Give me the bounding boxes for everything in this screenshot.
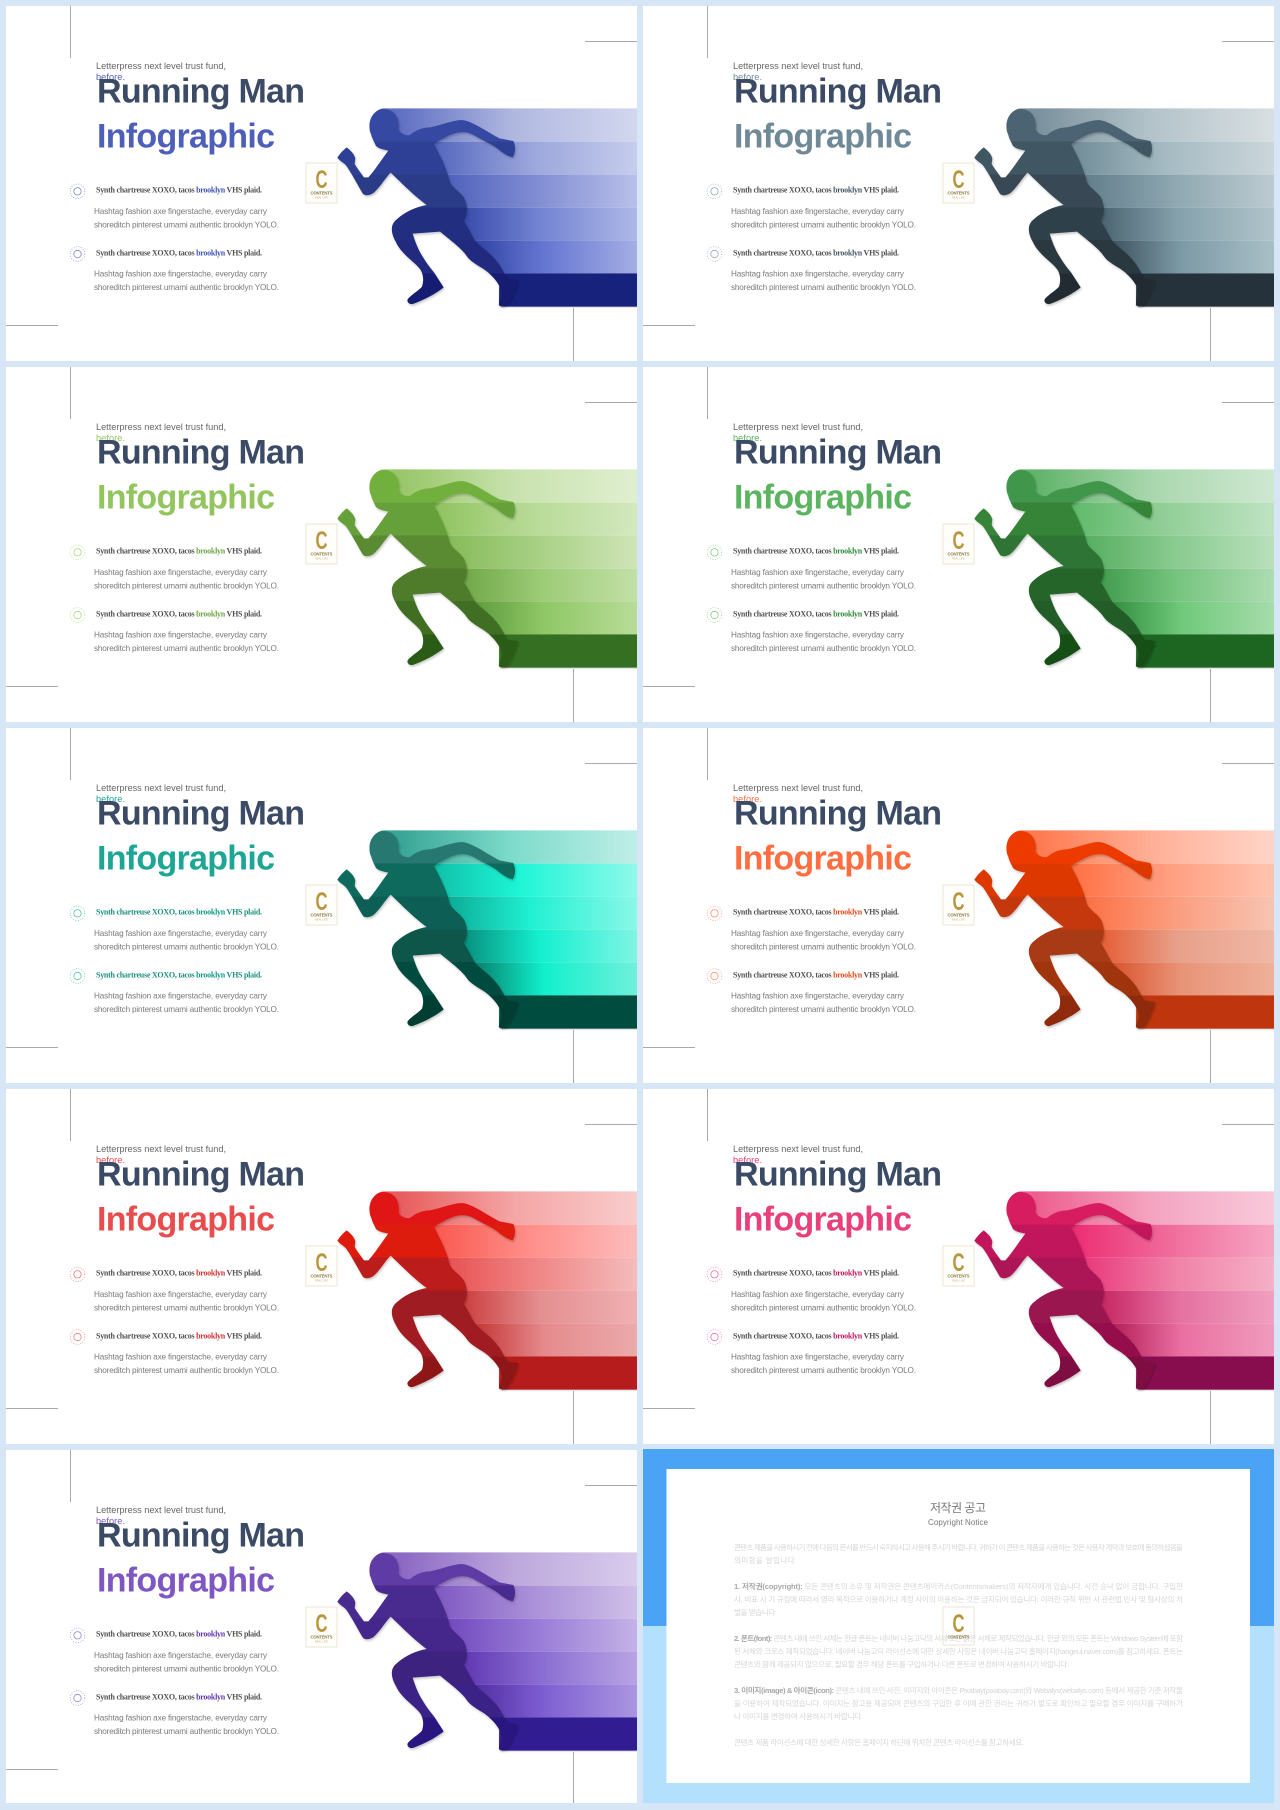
list item 1	[70, 184, 279, 230]
intro text: before.	[96, 794, 125, 804]
logo badge: CONTENTS	[310, 190, 333, 196]
heading: Infographic: Infographic	[97, 1562, 275, 1600]
heading: Infographic: Infographic	[97, 840, 275, 878]
intro text: Letterpress next level trust fund,	[96, 1505, 226, 1515]
list item 2: shoreditch pinterest umami authentic brooklyn YOLO.	[731, 1005, 916, 1014]
list item 2: Synth chartreuse XOXO, tacos brooklyn VHS plaid.	[733, 1331, 899, 1340]
intro text: Letterpress next level trust fund,	[733, 422, 863, 432]
logo badge: C	[316, 888, 328, 916]
logo badge: CONTENTS	[948, 552, 970, 556]
heading: Running Man: Running Man	[734, 794, 942, 832]
logo badge	[306, 885, 337, 925]
logo badge: REAL LIFE	[952, 196, 965, 200]
panel: light green slide	[6, 367, 637, 722]
list item 1: Synth chartreuse XOXO, tacos brooklyn VHS plaid.	[733, 908, 899, 917]
chart: speed bands and runner	[974, 1191, 1274, 1390]
list item 2: Synth chartreuse XOXO, tacos brooklyn VHS plaid.	[96, 1331, 262, 1340]
list item 1: shoreditch pinterest umami authentic brooklyn YOLO.	[731, 943, 916, 952]
list item 1: shoreditch pinterest umami authentic brooklyn YOLO.	[731, 582, 916, 591]
logo badge: REAL LIFE	[315, 556, 328, 560]
list item 2: Hashtag fashion axe fingerstache, everyday carry	[731, 630, 905, 640]
logo badge	[943, 1607, 974, 1645]
list item 1: Hashtag fashion axe fingerstache, everyday carry	[94, 1651, 268, 1660]
chart: speed bands and runner	[337, 108, 637, 307]
list item 1	[707, 184, 916, 230]
list item 2: Hashtag fashion axe fingerstache, everyday carry	[731, 1352, 905, 1362]
heading: Running Man: Running Man	[97, 72, 305, 110]
chart: speed bands and runner	[337, 830, 637, 1029]
chart: speed bands and runner	[974, 108, 1274, 307]
list item 2: Synth chartreuse XOXO, tacos brooklyn VHS plaid.	[96, 1692, 262, 1701]
intro text: Letterpress next level trust fund,	[733, 1144, 863, 1154]
logo badge: CONTENTS	[310, 1634, 333, 1640]
heading: Infographic: Infographic	[97, 1200, 275, 1238]
list item 1: Synth chartreuse XOXO, tacos brooklyn VHS plaid.	[96, 908, 262, 917]
logo badge: CONTENTS	[948, 190, 970, 196]
intro text: Letterpress next level trust fund,	[96, 422, 226, 432]
intro text: before.	[96, 433, 125, 443]
panel: purple slide	[6, 1450, 637, 1803]
logo badge	[306, 524, 337, 564]
notice body text: 벌을 받습니다.	[734, 1607, 777, 1617]
list item 2	[70, 247, 279, 292]
icon: runner silhouette	[337, 470, 518, 667]
panel: teal slide	[6, 728, 637, 1083]
list item 2: Hashtag fashion axe fingerstache, everyday carry	[94, 992, 268, 1000]
list item 1: Hashtag fashion axe fingerstache, everyday carry	[731, 1290, 905, 1299]
logo badge: C	[952, 527, 964, 555]
intro text: Letterpress next level trust fund,	[733, 61, 863, 71]
heading: Infographic: Infographic	[97, 478, 275, 516]
intro text	[733, 1144, 863, 1165]
list item 2	[70, 608, 279, 653]
logo badge: C	[316, 527, 328, 555]
logo badge	[306, 1246, 337, 1286]
logo badge: CONTENTS	[948, 1634, 970, 1640]
list item 2: Hashtag fashion axe fingerstache, everyday carry	[731, 992, 905, 1000]
list item 1: Synth chartreuse XOXO, tacos brooklyn VHS plaid.	[96, 1269, 262, 1278]
notice body text: 콘텐츠와 함께 제공되지 않으므로, 필요할 경우 해당 폰트를 구입하거나 다른 폰트로 변경하여 사용하시기 바랍니다.	[734, 1659, 1069, 1669]
heading: Running Man: Running Man	[97, 434, 305, 472]
logo badge: CONTENTS	[948, 1274, 970, 1278]
list item 2: shoreditch pinterest umami authentic brooklyn YOLO.	[94, 644, 279, 653]
list item 1: Synth chartreuse XOXO, tacos brooklyn VHS plaid.	[733, 1269, 899, 1278]
intro text	[733, 422, 863, 443]
logo badge: REAL LIFE	[315, 196, 328, 200]
chart: speed bands and runner	[337, 469, 637, 668]
logo badge: REAL LIFE	[315, 1278, 328, 1282]
intro text: before.	[96, 72, 125, 82]
logo badge: CONTENTS	[948, 912, 970, 918]
list item 2: shoreditch pinterest umami authentic brooklyn YOLO.	[731, 644, 916, 653]
intro text: before.	[733, 433, 762, 443]
icon: runner silhouette	[337, 109, 518, 306]
intro text	[96, 422, 226, 443]
list item 1	[707, 906, 916, 952]
list item 2: shoreditch pinterest umami authentic brooklyn YOLO.	[94, 1005, 279, 1014]
icon: runner silhouette	[974, 1192, 1155, 1389]
list item 1: shoreditch pinterest umami authentic brooklyn YOLO.	[94, 943, 279, 952]
logo badge: C	[952, 1249, 964, 1277]
heading: Running Man: Running Man	[97, 794, 305, 832]
list item 1: shoreditch pinterest umami authentic brooklyn YOLO.	[731, 221, 916, 230]
list item 1: Hashtag fashion axe fingerstache, everyday carry	[731, 207, 905, 216]
logo badge: REAL LIFE	[952, 1278, 965, 1282]
icon: runner silhouette	[974, 831, 1155, 1028]
list item 2: Hashtag fashion axe fingerstache, everyday carry	[731, 270, 905, 278]
notice body text: 2. 폰트(font): 콘텐츠 내에 쓰인 서체는 한글 폰트는 네이버 나눔고딕의 서체 또는 맑은 서체로 제작되었습니다. 한글 외의 모든 폰트는 Windows System에 포함	[734, 1633, 1183, 1643]
intro text	[96, 1505, 226, 1526]
list item 2: Synth chartreuse XOXO, tacos brooklyn VHS plaid.	[733, 970, 899, 979]
list item 1	[70, 1267, 279, 1313]
list item 1: Synth chartreuse XOXO, tacos brooklyn VHS plaid.	[96, 186, 262, 195]
panel: copyright notice	[643, 1449, 1274, 1803]
list item 2: Synth chartreuse XOXO, tacos brooklyn VHS plaid.	[733, 248, 899, 257]
intro text	[733, 783, 863, 804]
logo badge	[943, 1246, 974, 1286]
icon: runner silhouette	[337, 831, 518, 1028]
list item 2: Hashtag fashion axe fingerstache, everyday carry	[94, 270, 268, 278]
heading: Running Man: Running Man	[734, 72, 942, 110]
notice body text: 사, 비표 시 기 규정에 따라서 영리 목적으로 이용하거나 계정 사이의 이용하는 것은 금지되어 있습니다. 이러한 규칙 위반 시 관련법 민사 및 형사상의 처	[734, 1594, 1183, 1604]
logo badge: C	[316, 166, 328, 194]
list item 2: Synth chartreuse XOXO, tacos brooklyn VHS plaid.	[96, 609, 262, 618]
notice subtitle: Copyright Notice	[928, 1518, 989, 1527]
logo badge: REAL LIFE	[315, 1640, 328, 1644]
logo badge: C	[952, 888, 964, 916]
list item 1: shoreditch pinterest umami authentic brooklyn YOLO.	[94, 582, 279, 591]
logo badge	[306, 1607, 337, 1647]
panel: green slide	[643, 367, 1274, 722]
panel: pink slide	[643, 1089, 1274, 1444]
list item 2: Hashtag fashion axe fingerstache, everyday carry	[94, 1352, 268, 1362]
intro text: before.	[733, 794, 762, 804]
notice body text: 의미함을 알립니다.	[734, 1555, 797, 1565]
logo badge: CONTENTS	[310, 1274, 333, 1278]
chart: speed bands and runner	[974, 830, 1274, 1029]
list item 1: Hashtag fashion axe fingerstache, everyday carry	[94, 1290, 268, 1299]
logo badge: CONTENTS	[310, 912, 333, 918]
list item 1: shoreditch pinterest umami authentic brooklyn YOLO.	[94, 1665, 279, 1674]
logo badge: REAL LIFE	[952, 918, 965, 922]
intro text: Letterpress next level trust fund,	[733, 783, 863, 793]
list item 2: Hashtag fashion axe fingerstache, everyday carry	[94, 1714, 268, 1722]
logo badge	[943, 163, 974, 203]
list item 2: shoreditch pinterest umami authentic brooklyn YOLO.	[731, 1366, 916, 1375]
heading: Infographic: Infographic	[734, 1200, 912, 1238]
panel: orange slide	[643, 728, 1274, 1083]
panel: blue slide	[6, 6, 637, 361]
intro text	[733, 61, 863, 82]
list item 2	[70, 1691, 279, 1736]
icon: runner silhouette	[974, 470, 1155, 667]
logo badge	[306, 163, 337, 203]
intro text: before.	[733, 72, 762, 82]
list item 2: shoreditch pinterest umami authentic brooklyn YOLO.	[94, 283, 279, 292]
list item 2: Synth chartreuse XOXO, tacos brooklyn VHS plaid.	[733, 609, 899, 618]
list item 1: shoreditch pinterest umami authentic brooklyn YOLO.	[94, 221, 279, 230]
list item 2	[707, 1330, 916, 1375]
list item 1	[70, 545, 279, 591]
logo badge: C	[316, 1249, 328, 1277]
list item 1: Hashtag fashion axe fingerstache, everyday carry	[94, 207, 268, 216]
notice body text: 된 서체와 크로스 제작되었습니다. 네이버 나눔고딕 라이선스에 대한 상세한 사항은 네이버 나눔고딕 홈페이지(hangeul.naver.com)를 참고하세요. 폰트는	[734, 1646, 1183, 1656]
list item 1	[70, 906, 279, 952]
notice body text: 1. 저작권(copyright): 모든 콘텐츠의 소유 및 저작권은 콘텐츠메이커스(Contentsmakers)의 저작자에게 있습니다. 사전 승낙 없이 금합니다. 구입한	[734, 1581, 1183, 1591]
intro text: Letterpress next level trust fund,	[96, 61, 226, 71]
intro text	[96, 61, 226, 82]
notice body text: 콘텐츠 제품을 사용하시기 전에 다음의 문서를 반드시 숙지하시고 사용해 주시기 바랍니다. 귀하가 이 콘텐츠 제품을 사용하는 것은 사용자 계약과 보호에 동의하셨음을	[734, 1542, 1183, 1552]
logo badge: C	[952, 1610, 964, 1638]
notice title: 저작권 공고	[930, 1501, 986, 1515]
logo badge: REAL LIFE	[952, 556, 965, 560]
icon: runner silhouette	[337, 1553, 518, 1750]
list item 2	[707, 969, 916, 1014]
intro text: before.	[96, 1155, 125, 1165]
icon: runner silhouette	[337, 1192, 518, 1389]
heading: Running Man: Running Man	[97, 1156, 305, 1194]
notice body text: 콘텐츠 제품 라이선스에 대한 상세한 사항은 홈페이지 하단에 위치한 콘텐츠 라이선스를 참고하세요.	[734, 1737, 1024, 1747]
logo badge: C	[316, 1610, 328, 1638]
icon: runner silhouette	[974, 109, 1155, 306]
heading: Running Man: Running Man	[97, 1516, 305, 1554]
logo badge: REAL LIFE	[315, 918, 328, 922]
list item 2	[707, 247, 916, 292]
notice body text: 나 이미지를 변경하여 사용하시기 바랍니다.	[734, 1711, 863, 1721]
heading: Running Man: Running Man	[734, 434, 942, 472]
list item 2: shoreditch pinterest umami authentic brooklyn YOLO.	[94, 1366, 279, 1375]
intro text	[96, 783, 226, 804]
list item 1: Hashtag fashion axe fingerstache, everyday carry	[94, 929, 268, 938]
notice body text	[734, 1542, 1183, 1747]
list item 2: Hashtag fashion axe fingerstache, everyday carry	[94, 630, 268, 640]
heading: Infographic: Infographic	[734, 840, 912, 878]
list item 2: Synth chartreuse XOXO, tacos brooklyn VHS plaid.	[96, 970, 262, 979]
list item 1: Hashtag fashion axe fingerstache, everyday carry	[94, 568, 268, 577]
panel: red slide	[6, 1089, 637, 1444]
intro text: before.	[733, 1155, 762, 1165]
intro text: before.	[96, 1516, 125, 1526]
heading: Running Man: Running Man	[734, 1156, 942, 1194]
heading: Infographic: Infographic	[734, 478, 912, 516]
heading: Infographic: Infographic	[734, 118, 912, 156]
list item 1: shoreditch pinterest umami authentic brooklyn YOLO.	[731, 1304, 916, 1313]
intro text	[96, 1144, 226, 1165]
list item 2	[70, 1330, 279, 1375]
list item 1: Synth chartreuse XOXO, tacos brooklyn VHS plaid.	[733, 186, 899, 195]
intro text: Letterpress next level trust fund,	[96, 1144, 226, 1154]
list item 1: shoreditch pinterest umami authentic brooklyn YOLO.	[94, 1304, 279, 1313]
list item 1	[70, 1628, 279, 1674]
chart: speed bands and runner	[337, 1191, 637, 1390]
list item 2: shoreditch pinterest umami authentic brooklyn YOLO.	[94, 1727, 279, 1736]
list item 1	[707, 545, 916, 591]
list item 1: Synth chartreuse XOXO, tacos brooklyn VHS plaid.	[96, 1630, 262, 1639]
list item 2: shoreditch pinterest umami authentic brooklyn YOLO.	[731, 283, 916, 292]
notice body text: 3. 이미지(image) & 아이콘(icon): 콘텐츠 내에 쓰인 사진, 이미지와 아이콘은 Pixabay(pixabay.com)와 Webalys(webalys.com) 등에서 제공한 기준 저작물	[734, 1685, 1183, 1695]
logo badge	[943, 524, 974, 564]
list item 1: Synth chartreuse XOXO, tacos brooklyn VHS plaid.	[96, 547, 262, 556]
heading: Infographic: Infographic	[97, 118, 275, 156]
list item 1: Hashtag fashion axe fingerstache, everyday carry	[731, 568, 905, 577]
logo badge	[943, 885, 974, 925]
list item 1: Synth chartreuse XOXO, tacos brooklyn VHS plaid.	[733, 547, 899, 556]
panel: slate slide	[643, 6, 1274, 361]
logo badge: C	[952, 166, 964, 194]
list item 2: Synth chartreuse XOXO, tacos brooklyn VHS plaid.	[96, 248, 262, 257]
list item 2	[707, 608, 916, 653]
logo badge: CONTENTS	[310, 552, 333, 556]
notice body text: 을 이용하여 제작되었습니다. 이미지는 참고용 제공되며 콘텐츠의 구입한 후 이에 관한 권리는 귀하가 별도로 확인하고 필요할 경우 이미지를 구매하거	[734, 1698, 1183, 1708]
list item 1	[707, 1267, 916, 1313]
list item 1: Hashtag fashion axe fingerstache, everyday carry	[731, 929, 905, 938]
chart: speed bands and runner	[974, 469, 1274, 668]
intro text: Letterpress next level trust fund,	[96, 783, 226, 793]
chart: speed bands and runner	[337, 1552, 637, 1751]
list item 2	[70, 969, 279, 1014]
